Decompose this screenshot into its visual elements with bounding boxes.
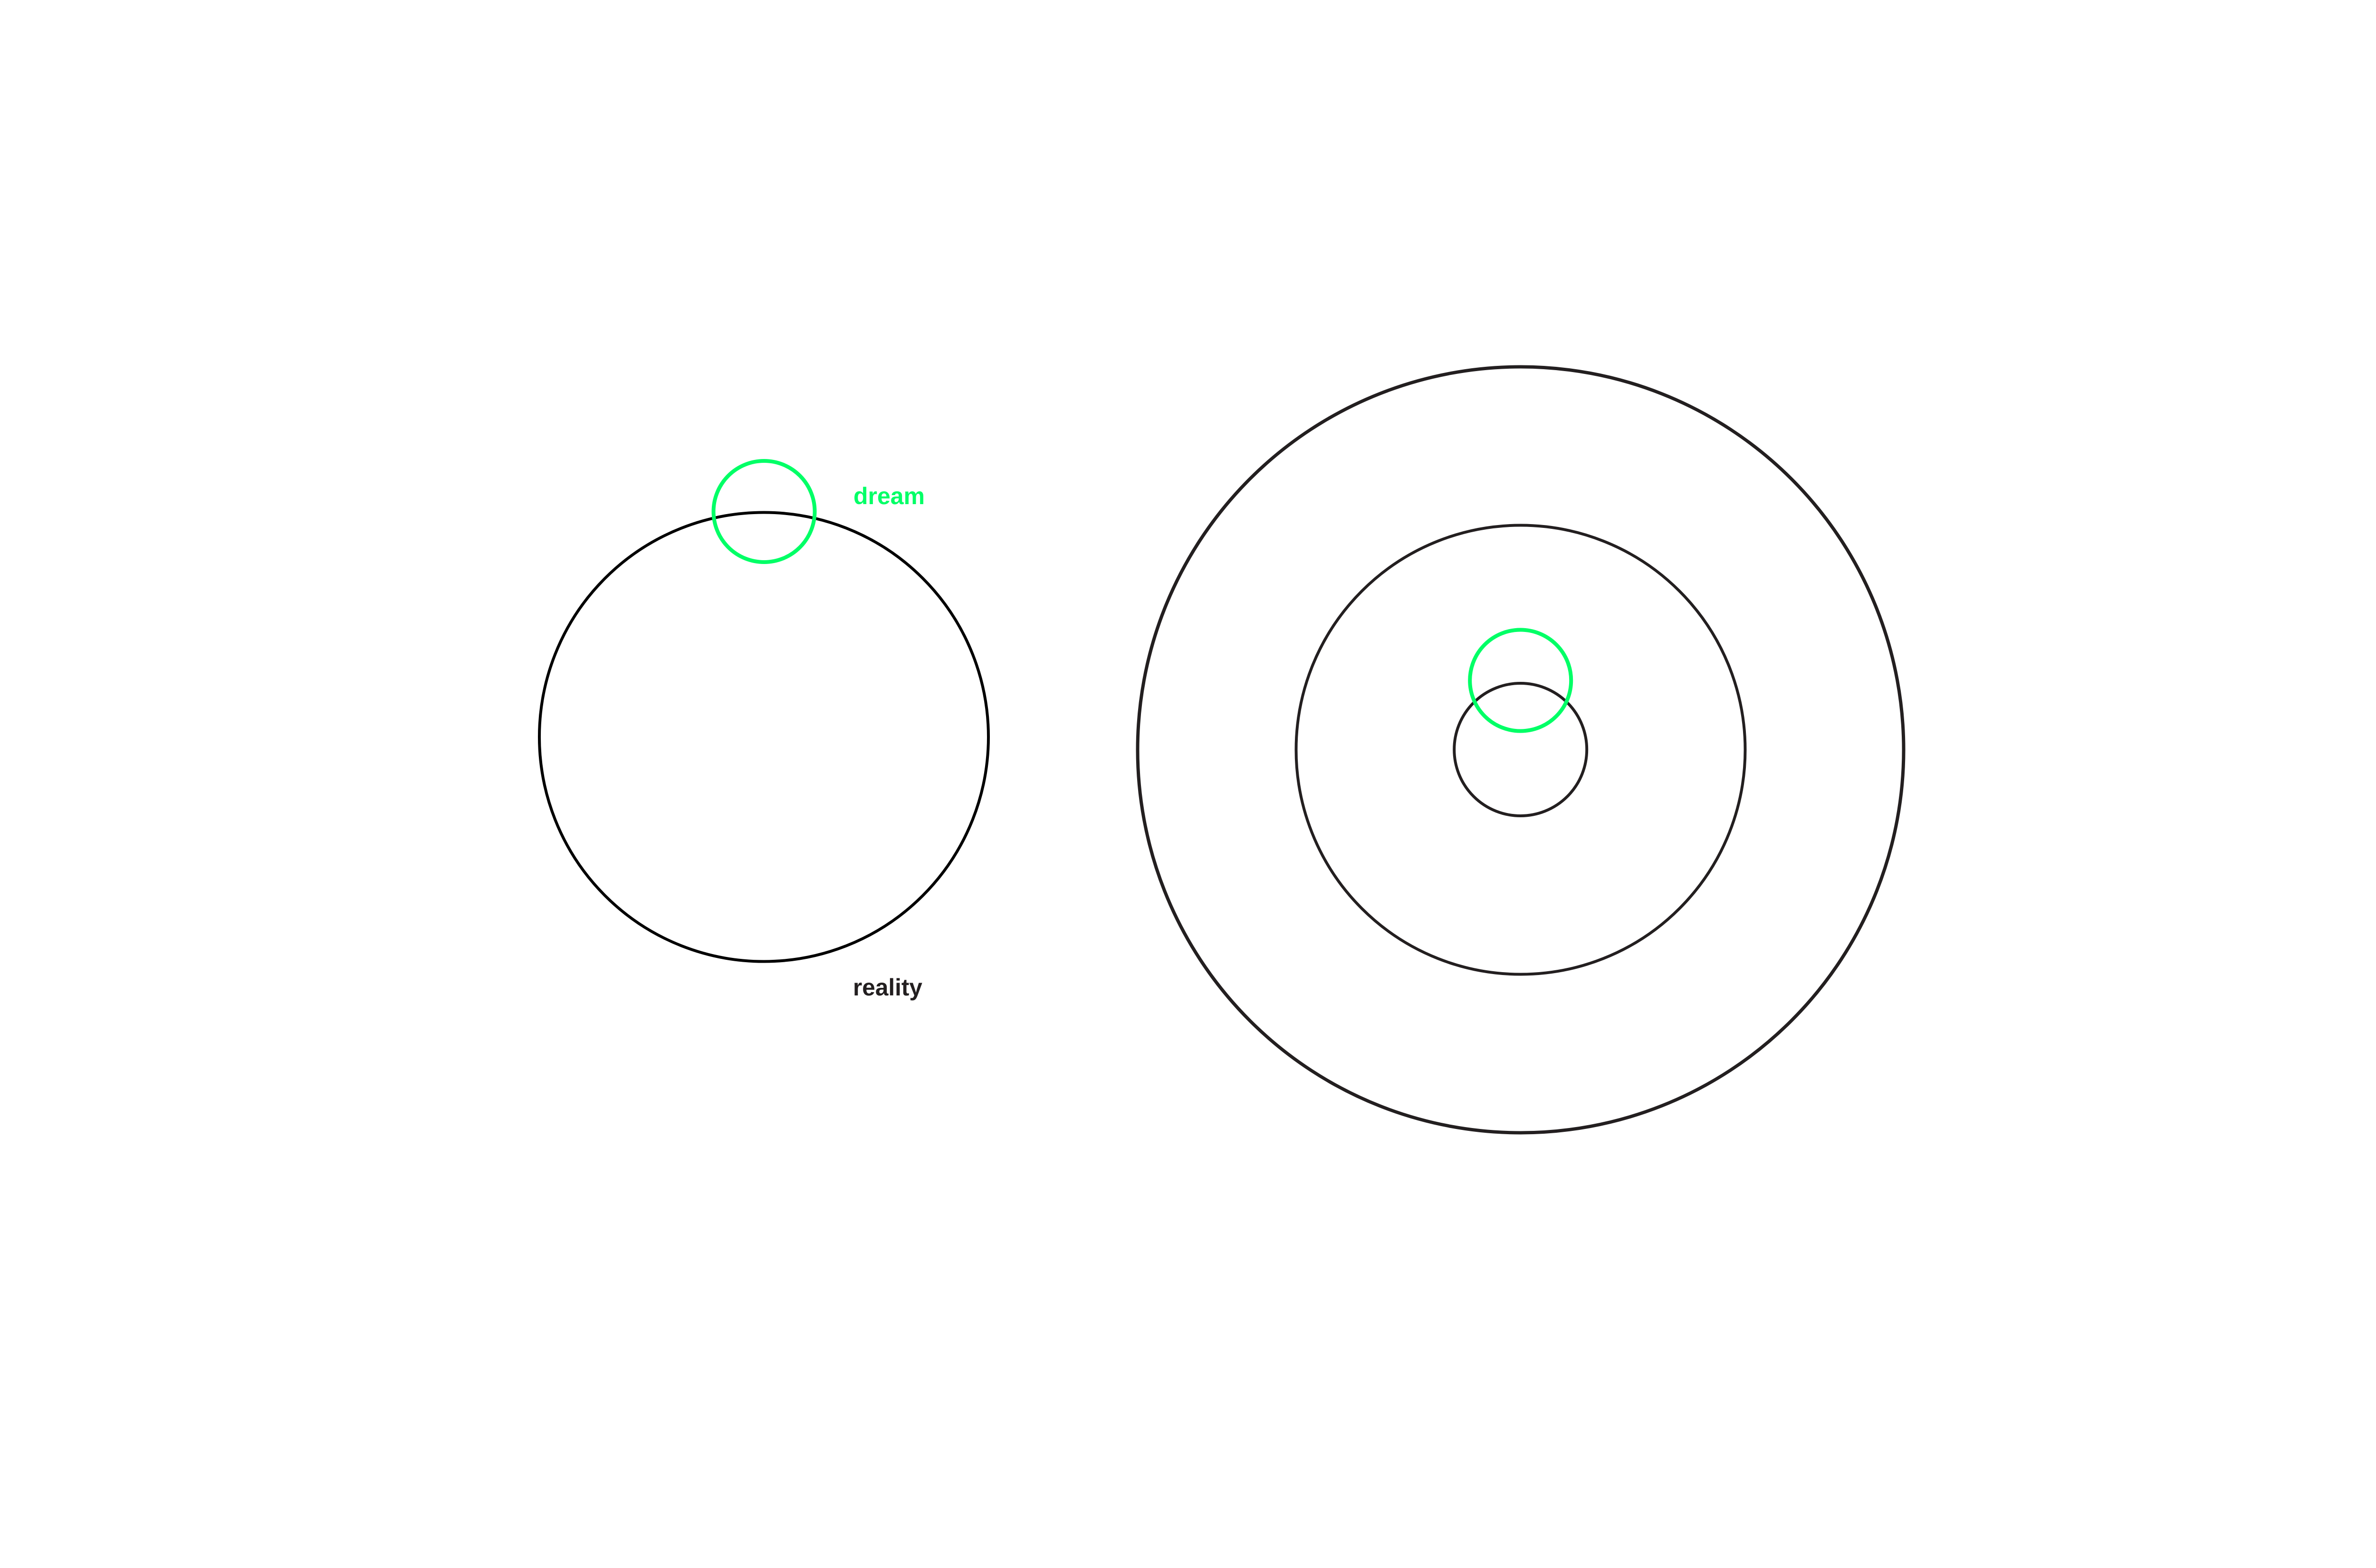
circle: inner ring (reality): [1454, 683, 1587, 816]
left diagram: dream on the edge of reality: [539, 461, 988, 1001]
right diagram: concentric reality circles with dream: [1138, 367, 1904, 1133]
circle: dream: [1470, 630, 1571, 731]
circle: middle ring: [1296, 526, 1745, 974]
circle: outer ring: [1138, 367, 1904, 1133]
label: reality: reality: [853, 974, 922, 1001]
circle: dream: [714, 461, 814, 562]
circle: reality (large): [539, 512, 988, 962]
label: dream: dream: [853, 483, 925, 509]
